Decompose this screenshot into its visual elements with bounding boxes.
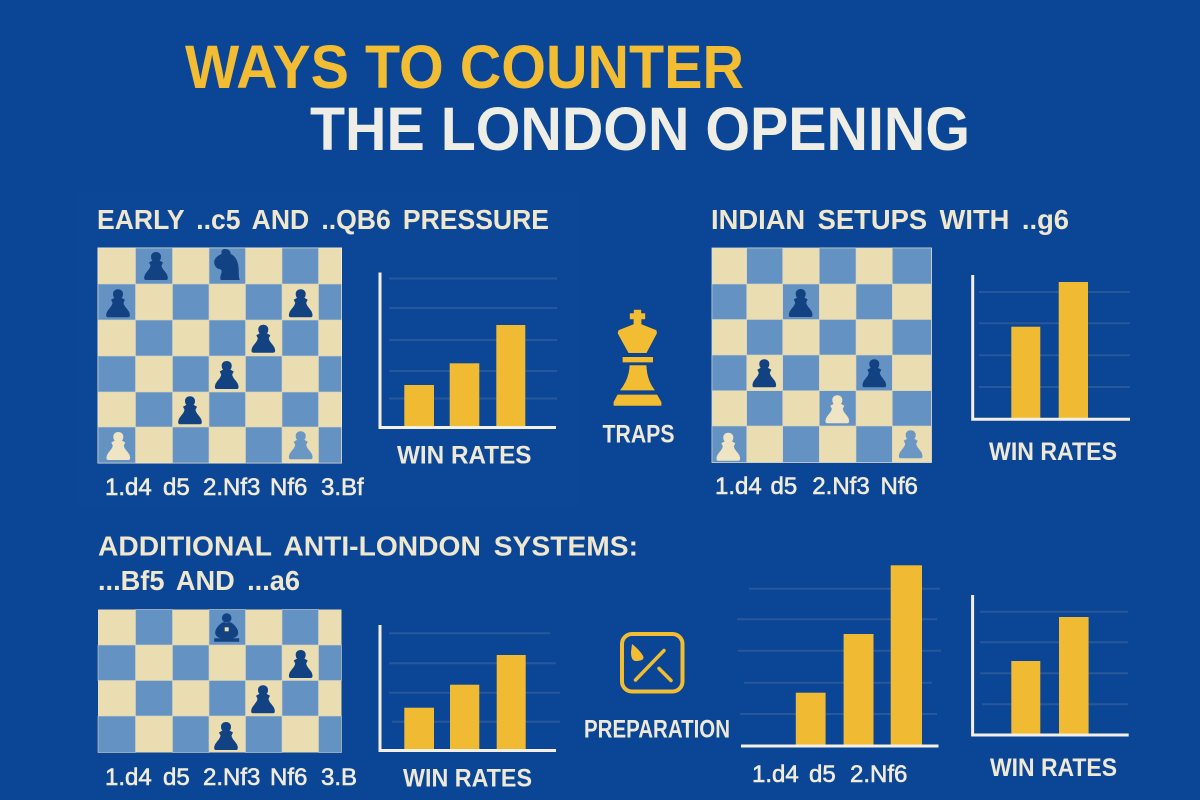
title bbox=[185, 33, 970, 163]
move list: 3.B bbox=[321, 764, 357, 791]
move list: 2.Nf6 bbox=[850, 761, 907, 788]
pawn bbox=[144, 252, 168, 280]
bar chart: win rates bbox=[380, 625, 560, 750]
knight bbox=[214, 249, 240, 280]
light blue pawn bbox=[899, 430, 923, 458]
white pawn bbox=[825, 395, 849, 423]
move list: 1.d4 bbox=[105, 764, 152, 791]
white pawn bbox=[716, 433, 740, 461]
pawn bbox=[862, 359, 886, 387]
bar chart: win rates bbox=[973, 275, 1130, 419]
bar chart: win rates bbox=[973, 595, 1129, 735]
chart label: WIN RATES bbox=[403, 765, 532, 793]
pawn bbox=[251, 685, 275, 713]
chess board: additional systems bbox=[98, 610, 342, 752]
move list: d5 bbox=[809, 761, 836, 788]
panel: additional anti-London systems bbox=[98, 530, 638, 793]
title: THE LONDON OPENING bbox=[310, 95, 970, 163]
move list: Nf6 bbox=[270, 764, 307, 791]
pawn bbox=[106, 289, 130, 317]
move list: 1.d4 bbox=[715, 473, 762, 500]
move list: 1.d4 bbox=[105, 474, 152, 501]
pawn bbox=[215, 361, 239, 389]
pawn bbox=[178, 396, 202, 424]
pawn bbox=[251, 325, 275, 353]
move list: d5 bbox=[770, 473, 797, 500]
pawn bbox=[289, 289, 313, 317]
callout: traps bbox=[602, 310, 674, 449]
move list: Nf6 bbox=[880, 473, 918, 500]
move list: 1.d4 bbox=[752, 761, 799, 788]
pawn bbox=[789, 289, 813, 317]
heading: additional systems: ADDITIONAL ANTI-LONDON SYSTEMS: bbox=[98, 530, 638, 562]
heading: early c5: EARLY ..c5 AND ..QB6 PRESSURE bbox=[97, 204, 549, 235]
bar chart: win rates bbox=[380, 272, 557, 428]
heading: additional systems bbox=[98, 530, 638, 596]
move list: d5 bbox=[163, 764, 190, 791]
icon: preparation tools bbox=[622, 634, 682, 692]
chess board: Indian setups bbox=[712, 248, 932, 462]
label: preparation: PREPARATION bbox=[584, 716, 730, 744]
bar chart: opening moves bbox=[737, 565, 941, 746]
heading: additional systems: ...Bf5 AND ...a6 bbox=[98, 565, 300, 596]
move list: d5 bbox=[163, 474, 190, 501]
move list: 2.Nf3 bbox=[203, 474, 260, 501]
bishop bbox=[214, 613, 239, 642]
move list: 3.Bf bbox=[321, 474, 364, 501]
title: WAYS TO COUNTER bbox=[185, 33, 744, 101]
move list: 2.Nf3 bbox=[812, 473, 870, 500]
panel: Indian setups bbox=[711, 204, 1130, 500]
callout: preparation bbox=[584, 634, 730, 744]
heading: Indian setups: INDIAN SETUPS WITH ..g6 bbox=[711, 204, 1069, 235]
pawn bbox=[214, 722, 238, 750]
white pawn bbox=[106, 432, 130, 460]
pawn bbox=[752, 359, 776, 387]
chart label: WIN RATES bbox=[397, 442, 532, 470]
move list: 2.Nf3 bbox=[203, 764, 260, 791]
panel: early c5 and Qb6 pressure bbox=[97, 204, 557, 501]
pawn bbox=[289, 650, 313, 678]
label: traps: TRAPS bbox=[602, 421, 674, 449]
icon: king bbox=[613, 310, 662, 406]
light blue pawn bbox=[289, 431, 313, 459]
chart label: WIN RATES bbox=[990, 754, 1117, 782]
chess board: early c5 bbox=[98, 248, 342, 463]
move list: Nf6 bbox=[270, 474, 307, 501]
chart label: WIN RATES bbox=[989, 438, 1117, 466]
